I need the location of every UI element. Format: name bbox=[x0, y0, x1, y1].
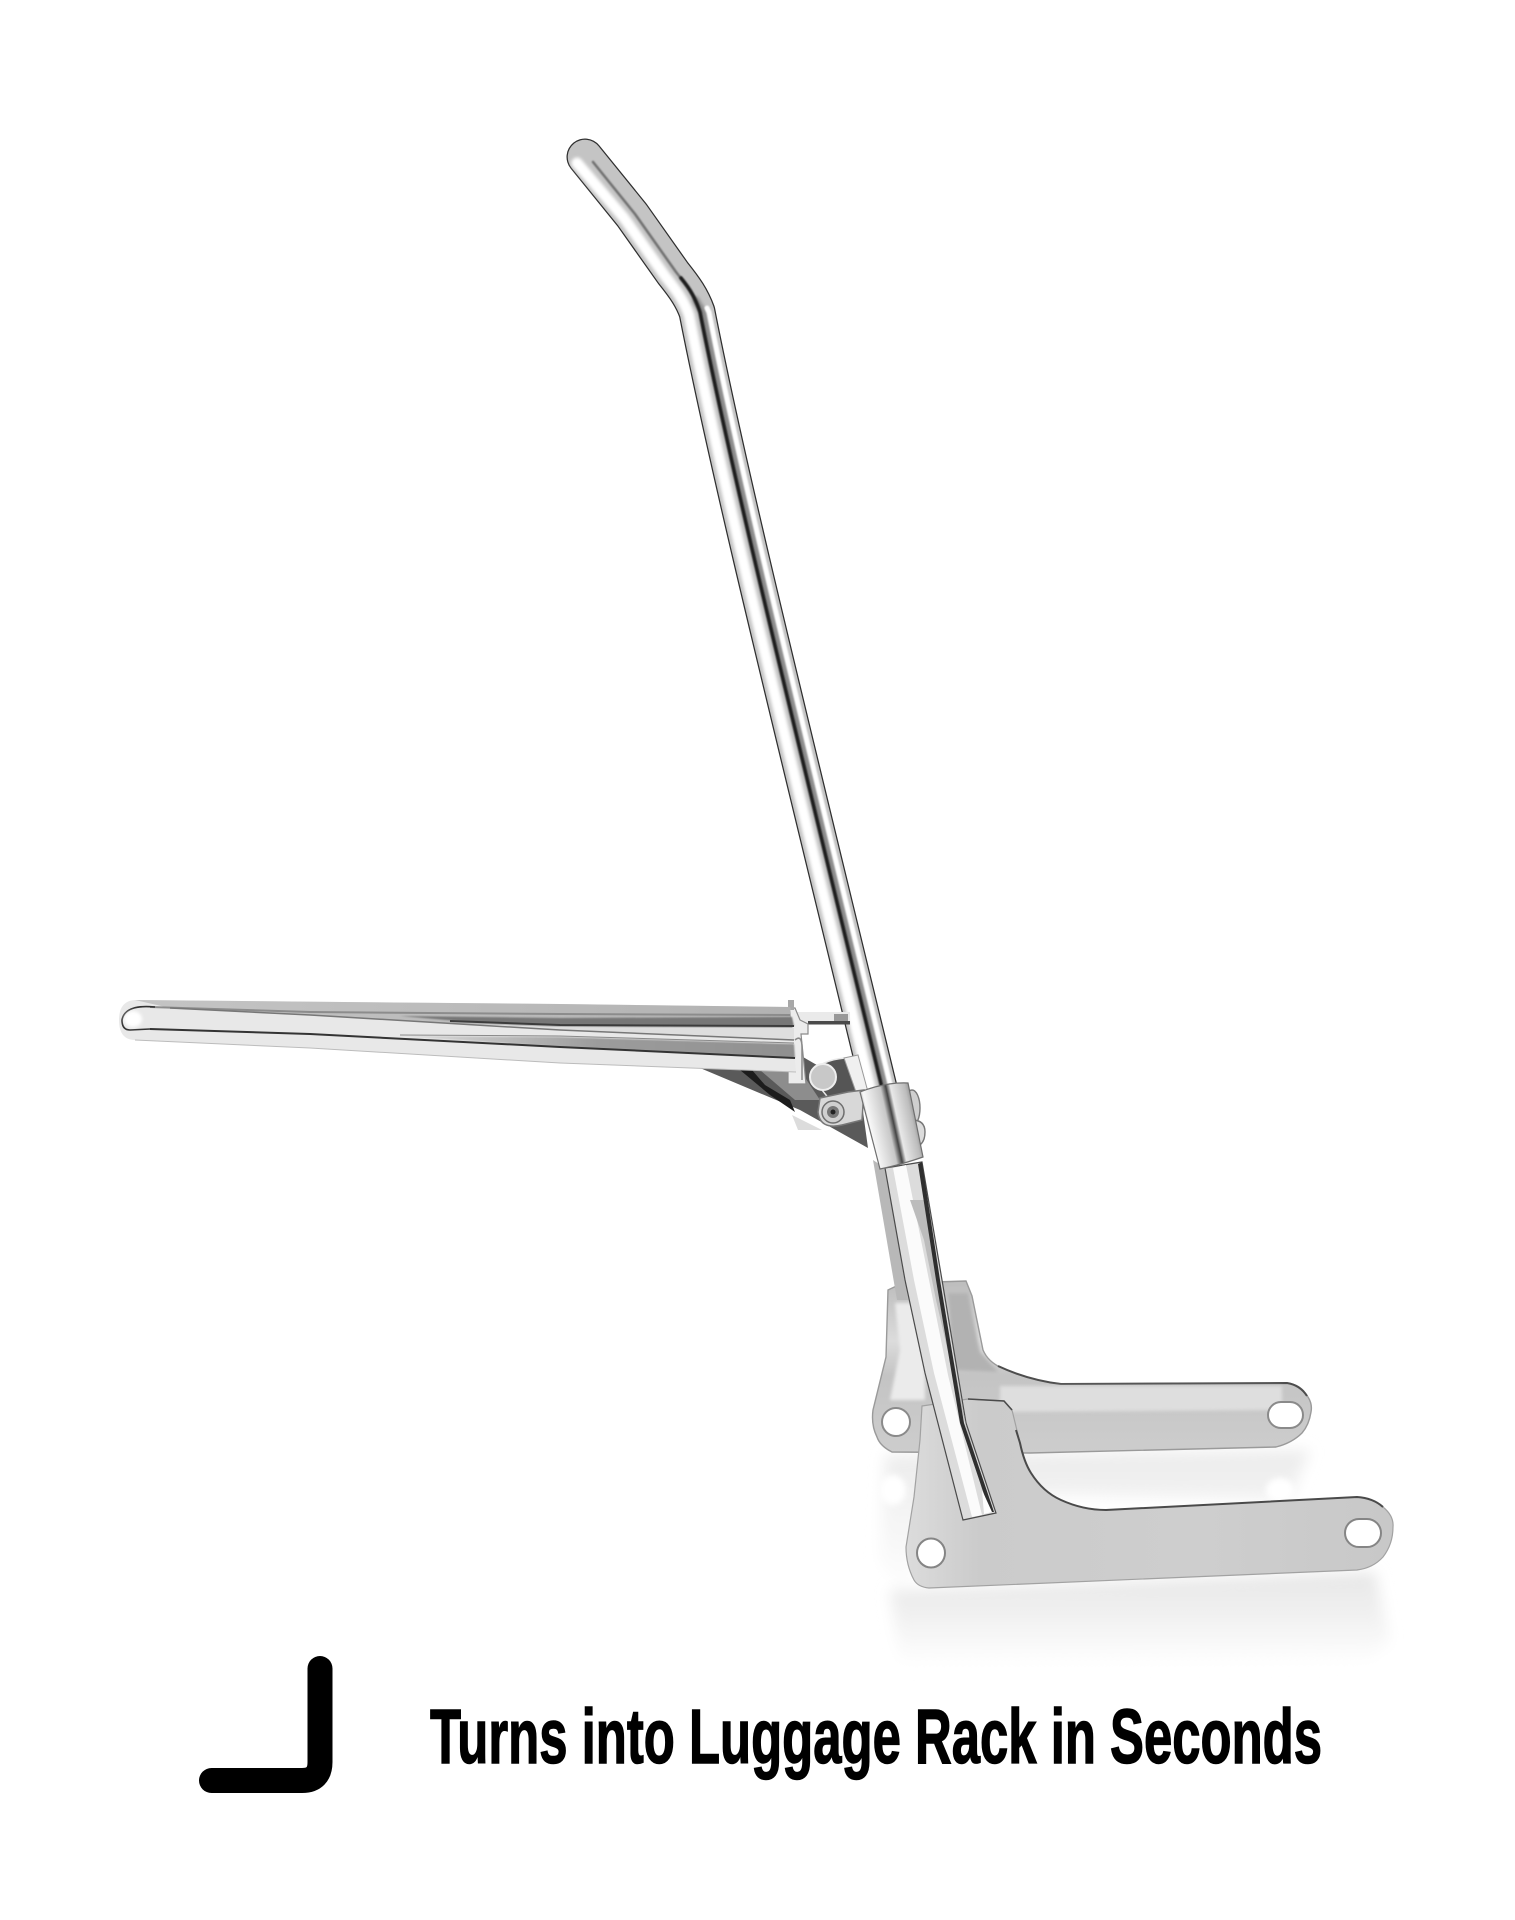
folded luggage rack bracket with hinge bbox=[700, 1000, 868, 1148]
seat-back upright tube, lower section bbox=[873, 1160, 996, 1520]
hinge bolt bbox=[818, 1090, 864, 1126]
rear mounting bracket (foot) bbox=[872, 1281, 1311, 1453]
front bracket mounting holes bbox=[917, 1519, 1381, 1568]
icon: black L-shaped rack silhouette bbox=[212, 1668, 320, 1780]
floor reflection: soft shadow under feet bbox=[880, 1450, 1390, 1665]
rear bracket mounting holes bbox=[882, 1402, 1303, 1436]
tube clamp sleeve with bolts bbox=[860, 1083, 925, 1169]
rack latch rod bbox=[788, 1000, 850, 1084]
seat-back upright tube, upper section bbox=[577, 157, 892, 1095]
folded rack tube (horizontal) bbox=[119, 1000, 796, 1072]
front mounting bracket (foot) bbox=[906, 1399, 1393, 1588]
hinge plate and round pivot bbox=[810, 1055, 868, 1100]
